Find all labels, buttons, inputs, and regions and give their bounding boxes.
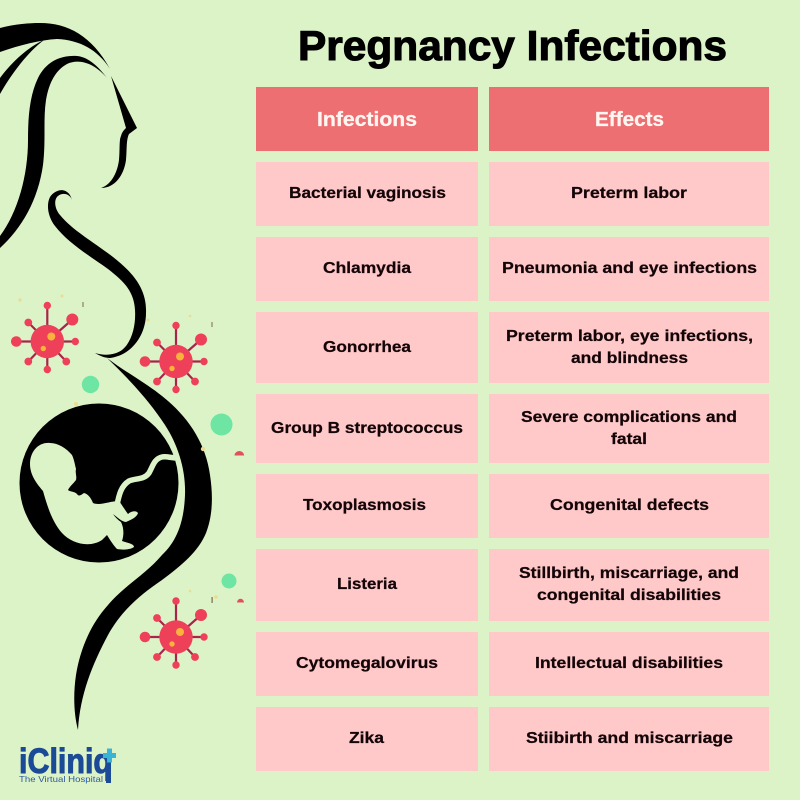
illustration: pregnant woman silhouette: [0, 23, 212, 730]
row effect: Stillbirth, miscarriage, and congenital disabilities: congenital disabilities: [537, 587, 721, 604]
row: Listeria: Listeria: [337, 576, 397, 593]
row: Gonorrhea: [256, 312, 478, 383]
icon: virus middle: [140, 322, 208, 393]
logo descender: [106, 760, 111, 783]
row effect: Congenital defects: Congenital defects: [550, 497, 709, 514]
row: Listeria: [256, 549, 478, 621]
row: Zika: [256, 707, 478, 771]
row: Chlamydia: [256, 237, 478, 301]
row effect: Preterm labor: Preterm labor: [571, 185, 687, 202]
table header: Infections: Infections: [317, 108, 417, 131]
chest and neck line: [48, 190, 146, 358]
row effect: Preterm labor, eye infections, and blindness: and blindness: [571, 350, 688, 367]
row: Gonorrhea: Gonorrhea: [323, 339, 411, 356]
logo wordmark: iCliniq: [19, 742, 112, 781]
icon: dark specks: [82, 302, 213, 603]
row effect: Intellectual disabilities: Intellectual disabilities: [535, 655, 723, 672]
logo tagline: The Virtual Hospital: [19, 774, 103, 784]
row: Cytomegalovirus: Cytomegalovirus: [296, 655, 438, 672]
row effect: Stillbirth, miscarriage, and congenital disabilities: [489, 549, 769, 621]
logo plus: [103, 748, 116, 762]
row effect: Preterm labor: [489, 162, 769, 226]
hair second strand: [0, 40, 44, 94]
row effect: Stillbirth, miscarriage, and congenital disabilities: Stillbirth, miscarriage, and: [519, 565, 739, 582]
row effect: Preterm labor, eye infections, and blindness: [489, 312, 769, 383]
icon: red particles: [234, 451, 244, 602]
icon: virus left: [11, 302, 79, 373]
icon: green dot 1: [82, 376, 99, 393]
row: Toxoplasmosis: [256, 474, 478, 538]
row effect: Preterm labor, eye infections, and blindness: Preterm labor, eye infections,: [506, 328, 753, 345]
row effect: Congenital defects: [489, 474, 769, 538]
row effect: Intellectual disabilities: [489, 632, 769, 696]
belly curve: [74, 358, 212, 730]
row: Chlamydia: Chlamydia: [323, 260, 411, 277]
icon: green dot 2: [210, 414, 232, 436]
icon: green dot 3: [222, 574, 236, 588]
row: Bacterial vaginosis: [256, 162, 478, 226]
row effect: Pneumonia and eye infections: [489, 237, 769, 301]
row: Cytomegalovirus: [256, 632, 478, 696]
row effect: Stiibirth and miscarriage: [489, 707, 769, 771]
womb circle: [20, 404, 178, 562]
icon: yellow particles: [18, 294, 218, 599]
logo: iCliniq: [19, 742, 116, 784]
table header: Effects: [489, 87, 769, 151]
hair top strand: [0, 23, 110, 69]
hair long strand: [0, 56, 107, 248]
icon: virus lower: [140, 597, 208, 669]
row: Zika: Zika: [349, 730, 384, 747]
row: Toxoplasmosis: Toxoplasmosis: [303, 497, 426, 514]
embryo: [30, 443, 138, 550]
row effect: Severe complications and fatal: fatal: [611, 431, 647, 448]
row effect: Severe complications and fatal: Severe complications and: [521, 409, 737, 426]
umbilical cord: [117, 457, 177, 505]
table header: Infections: [256, 87, 478, 151]
row: Group B streptococcus: Group B streptococcus: [271, 420, 463, 437]
table header: Effects: Effects: [595, 108, 664, 131]
row effect: Severe complications and fatal: [489, 394, 769, 463]
row effect: Stiibirth and miscarriage: Stiibirth and miscarriage: [526, 730, 733, 747]
face profile: [101, 76, 137, 188]
row: Bacterial vaginosis: Bacterial vaginosis: [289, 185, 446, 202]
row effect: Pneumonia and eye infections: Pneumonia and eye infections: [502, 260, 757, 277]
title: Pregnancy Infections: [298, 22, 727, 69]
row: Group B streptococcus: [256, 394, 478, 463]
